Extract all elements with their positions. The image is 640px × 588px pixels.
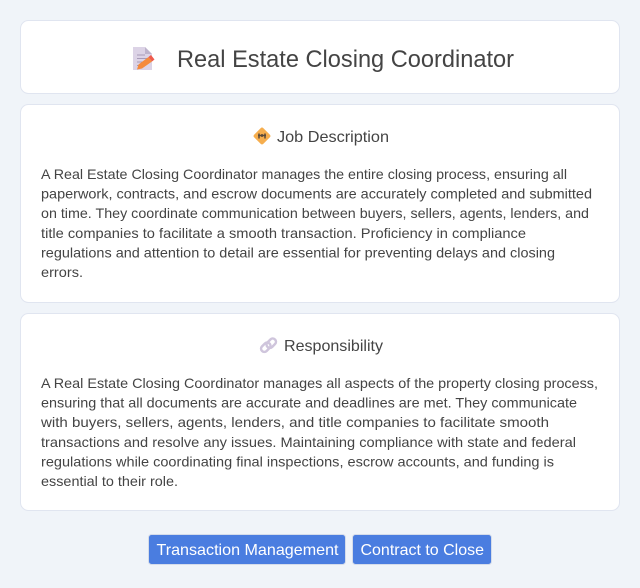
icon: document with pencil [133,47,154,70]
title: Real Estate Closing Coordinator [177,46,514,73]
button: contract to close: Contract to Close [360,542,484,559]
panel: title header [20,20,620,94]
text block: responsibility: essential to their role. [41,473,178,489]
text block: responsibility: with buyers, sellers, agents, lenders, and title companies to facilitate smooth [40,414,549,430]
button: transaction management [148,534,346,564]
text block: job description: title companies to facilitate a smooth transaction. Proficiency in compliance [41,225,526,241]
heading: responsibility: Responsibility [284,338,383,355]
text block: responsibility: regulations while coordinating final inspections, escrow accounts, and funding is [41,453,554,469]
text block: job description: paperwork, contracts, and escrow documents are accurately completed and submitted [41,186,592,202]
button: contract to close [352,534,492,564]
text block: job description: A Real Estate Closing Coordinator manages the entire closing process, ensuring all [41,166,567,182]
text block: job description: regulations and attention to detail are essential for preventing delays and closing [41,244,555,260]
heading: job description: Job Description [277,129,389,146]
panel: job description [20,104,620,302]
icon: chain link [260,337,277,353]
text block: responsibility: transactions and resolve any issues. Maintaining compliance with state and federal [41,434,576,450]
text block: responsibility: A Real Estate Closing Coordinator manages all aspects of the property closing process, [41,375,598,391]
text block: responsibility [40,375,598,489]
text block: responsibility: ensuring that all documents are accurate and deadlines are met. They communicate [41,395,577,411]
panel: responsibility [20,314,620,510]
button: transaction management: Transaction Management [156,542,339,559]
icon: diamond sign [253,127,271,145]
text block: job description: on time. They coordinate communication between buyers, sellers, agents, lenders, and [41,205,589,221]
text block: job description [41,166,592,280]
text block: job description: errors. [41,264,83,280]
